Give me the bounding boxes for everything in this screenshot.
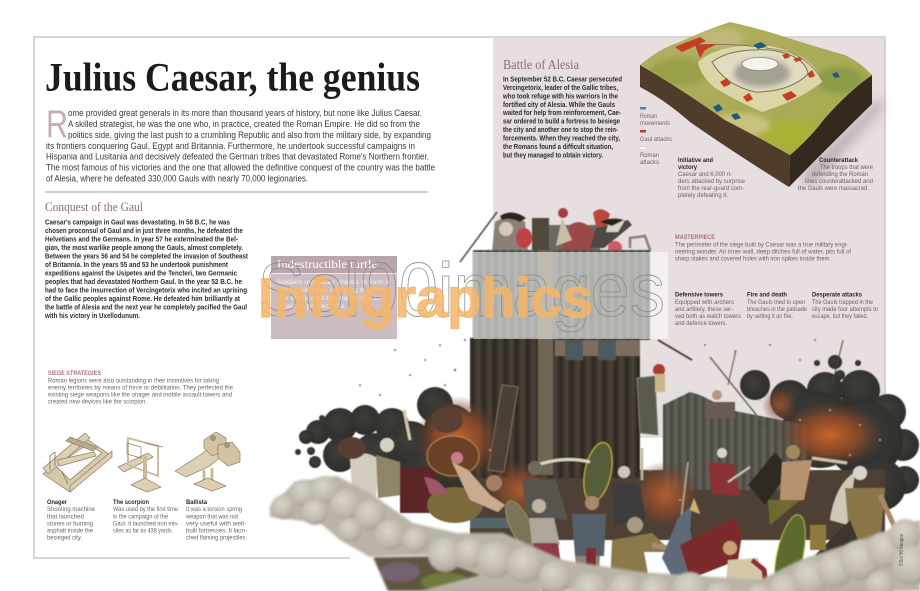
Alesia text: the Romans found a difficult situation, [503,142,613,151]
battling soldiers [338,407,896,591]
panel: indestructible turtle: protective shell, covering the front, [277,287,389,294]
soldier behind palisade [705,390,735,418]
ladder right [637,376,658,435]
panel: indestructible turtle: Indestructible turtle [277,259,377,271]
callout: fire and death: Fire and death [747,292,787,298]
red camps [675,37,815,102]
panel: indestructible turtle: against projectiles. [277,303,347,310]
conquest text: chosen proconsul of Gaul and in just three months, he defeated the [45,226,243,235]
Alesia text: waited for help from reinforcement, Cae- [502,108,621,117]
callout: counterattack [798,157,873,192]
caption: onager: that launched [47,514,84,520]
caption: onager: stones or burning [47,520,93,528]
siege text: created new devices like the scorpion. [48,398,147,406]
legend: Gaul attacks [640,136,673,143]
panel: indestructible turtle: Soldiers used their shields to form a [277,279,390,286]
callout: initiative and victory: victory [678,164,697,171]
green shield [769,512,811,591]
icon: scorpion [118,438,163,492]
masterpiece text: The perimeter of the siege built by Caesar was a true military engi- [675,242,848,248]
callout: desperate attacks: city made four attempts to [812,306,878,313]
callout: fire and death [747,292,807,320]
terrain left side [640,65,790,187]
callout: initiative and victory: Caesar and 6,000 ri- [678,171,732,178]
callout: counterattack: the Gauls were massacred. [798,185,869,192]
terrain shadow [800,100,884,184]
tower upper wall [473,250,650,340]
Alesia text: the city and another one to stop the rein- [503,125,618,134]
callout: defensive towers: Defensive towers [675,292,723,298]
heading: siege strategies: SIEGE STRATEGIES [48,370,101,377]
round shields [338,407,483,523]
soldier with helmet crest [424,452,520,528]
drop cap: R [46,103,68,146]
title: Julius Caesar, the genius [45,54,420,100]
caption: onager [47,499,95,542]
big armoured soldier [610,517,690,591]
caption: scorpion: in the campaign of the [113,514,168,520]
callout: desperate attacks [812,292,878,320]
intro text: ome provided great generals in its more than thousand years of history, but none like Julius Caesar. [68,108,422,118]
intro text: The most famous of his victories and the one that allowed the definitive conquest of the country was the battle [46,162,435,172]
dark smoke clouds [295,355,919,511]
masterpiece text: neering wonder. An inner wall, deep ditches full of water, pits full of [675,248,851,256]
caption: ballista [185,499,247,542]
soldiers centre-back [500,448,646,553]
masterpiece text [675,234,851,262]
credit: ©Sol 90 Images [898,534,905,566]
siege text: Roman legions were also outstanding in their incentives for taking [48,378,219,384]
legend [640,107,673,166]
conquest text: gian, the most warlike people among the Gauls, almost completely. [45,243,243,252]
Alesia text: forcements. When they reached the city, [503,134,620,142]
intro text [46,108,435,184]
caption: scorpion: Was used by the first time [113,506,178,513]
figures on lower platform [565,340,616,360]
legend: attacks [640,159,660,166]
soldiers on tower top [460,208,650,262]
conquest text: had to face the insurrection of Vercingetorix who incited an uprising [45,286,247,294]
legend: Roman [640,152,659,159]
caption: onager: besieged city. [47,534,82,542]
right palisade [663,392,807,490]
callout: defensive towers: Equipped with archers [675,299,735,306]
panel: battle of Alesia background [493,38,885,438]
conquest text: Helvetians and the Germans. In year 57 he exterminated the Bel- [45,234,238,244]
watermark: outlined text: Sol90images [258,248,665,333]
ladder left [488,385,518,472]
callout: desperate attacks: The Gauls trapped in the [812,299,873,306]
intro text: politics side, giving the last push to a crumbling Republic and also from the military side, by expanding [68,130,431,140]
siege text [48,378,233,406]
callout: fire and death: The Gauls tried to open [747,299,805,306]
barbarian warrior [748,445,847,525]
red legionary [529,499,564,591]
watermark haze [473,252,668,339]
legionary foreground [723,541,768,591]
callout: defensive towers: and defence towers. [675,320,727,327]
conquest text: of the Gallic peoples against Rome. He defeated him brilliantly at [45,294,240,303]
callout: initiative and victory: from the rear-guard com- [678,185,744,192]
callout: desperate attacks: Desperate attacks [812,292,862,298]
callout: initiative and victory: ders attacked by surprise [678,178,745,185]
callout: counterattack: The troops that were [820,164,873,171]
caption: ballista: weapon that was not [185,514,238,520]
conquest text: with his victory in Uxellodunum. [44,311,140,320]
oval shield back [579,440,617,504]
left shield bearer [350,410,436,513]
icon: ballista [175,432,240,491]
ground foliage [373,555,890,591]
siege text: enemy territories by means of force or debilitation. They perfected the [48,384,233,392]
sparks [359,339,816,396]
divider rule [45,192,428,193]
caption: ballista: built fortresses. It laun- [186,528,247,534]
caption: onager: Onager [47,499,67,506]
blue units [713,42,840,120]
callout: fire and death: breaches in the palisade [747,306,807,313]
pole and guard [653,340,843,432]
illustration: siege battle [270,208,920,591]
conquest text: of Britannia. In the years 55 and 53 he undertook punishment [45,260,228,269]
watermark: orange text: Infographics [258,266,593,329]
tower palisade [470,338,640,478]
callout: fire and death: by setting it on fire. [747,313,793,320]
legend: movements [640,120,671,127]
red shield [680,517,742,579]
winged warrior [810,466,896,570]
chart: 3D terrain map of Alesia [630,15,884,187]
intro text: Hispania and Lusitania and decisively defeated the German tribes that devastated Rome's Northern frontier. [46,152,429,162]
icon: onager [43,433,112,492]
callout: initiative and victory: pletely defeating it. [678,192,728,199]
dust puffs [271,476,920,591]
conquest text: expeditions against the Usipetes and the Tencteri, two Germanic [45,268,237,278]
heading: battle of Alesia: Battle of Alesia [503,57,579,72]
callout: defensive towers [675,292,742,327]
intro text: of Alesia, where he defeated 330,000 Gauls with nearly 70,000 legionaries. [46,174,308,184]
callout: defensive towers: and artillery, these ser- [675,306,733,313]
caption: scorpion: Gaul. It launched iron mis- [113,520,179,528]
central post [538,250,553,475]
fire [414,387,884,529]
Alesia text: sar ordered to build a fortress to besiege [503,116,620,126]
callout: defensive towers: ved both as watch towers [675,313,742,320]
Alesia text: Vercingetorix, leader of the Gallic tribes, [503,83,618,92]
caption: ballista: It was a torsion spring [186,506,242,513]
defensive tower [460,208,658,478]
Alesia text: who took refuge with his warriors in the [502,92,618,100]
embers [409,399,881,501]
caption: onager: Shooting machine [47,506,95,513]
callout: desperate attacks: escape, but they failed. [812,313,868,320]
caption: onager: asphalt inside the [47,528,93,534]
soldiers at lower platform [555,340,640,356]
legend: Roman [640,113,657,120]
Alesia text [502,74,622,160]
caption: ballista: very useful with well- [186,520,246,528]
soldier with raised sword [708,448,750,496]
conquest text: the battle of Alesia and the next year he completely pacified the Gaul [45,302,247,312]
Alesia text: but they managed to obtain victory. [503,150,603,160]
battle background mass [470,470,885,540]
terrain surface [640,22,872,155]
caption: scorpion [113,499,179,534]
callout: counterattack: Counterattack [819,157,858,164]
callout: counterattack: defending the Roman [812,171,868,178]
masterpiece text: sharp stakes and covered holes with iron spikes inside them. [675,256,831,262]
conquest text: Caesar's campaign in Gaul was devastating. In 58 B.C, he was [45,218,230,226]
caption: ballista: ched flaming projectiles. [186,534,247,542]
caption: ballista: Ballista [186,499,207,506]
spearman [662,462,700,591]
siege text: existing siege weapons like the onager and mobile assault towers and [48,392,232,398]
callout: initiative and victory [678,157,745,199]
conquest text: peoples that had devastated Northern Gaul. In the year 52 B.C. he [45,277,242,286]
callout: counterattack: lines counterattacked and [805,178,873,185]
panel: indestructible turtle: the sides and the top of the unit [277,295,387,302]
dust mass [270,476,920,591]
masterpiece text: MASTERPIECE [675,234,715,241]
conquest text: Between the years 56 and 54 he completed the invasion of Southeast [45,252,248,260]
Alesia text: In September 52 B.C. Caesar persecuted [503,74,622,84]
legionary centre [572,496,606,591]
intro text: A skilled strategist, he was the one who, in practice, created the Roman Empire. He did so from the [68,119,420,129]
Alesia text: fortified city of Alesia. While the Gauls [503,100,615,109]
conquest text [44,218,248,320]
panel: indestructible turtle [271,256,397,339]
intro text: its frontiers conquering Gaul, Egypt and Britannia. Furthermore, he undertook successful campaigns in [46,141,415,151]
callout: initiative and victory: Initiative and [678,157,713,164]
terrain right side [789,75,872,187]
foreground dust clouds [270,476,920,591]
curved sword [530,460,590,468]
caption: scorpion: siles as far as 438 yards. [113,528,173,534]
caption: scorpion: The scorpion [113,499,149,506]
heading: conquest of the Gaul: Conquest of the Gaul [45,199,143,214]
